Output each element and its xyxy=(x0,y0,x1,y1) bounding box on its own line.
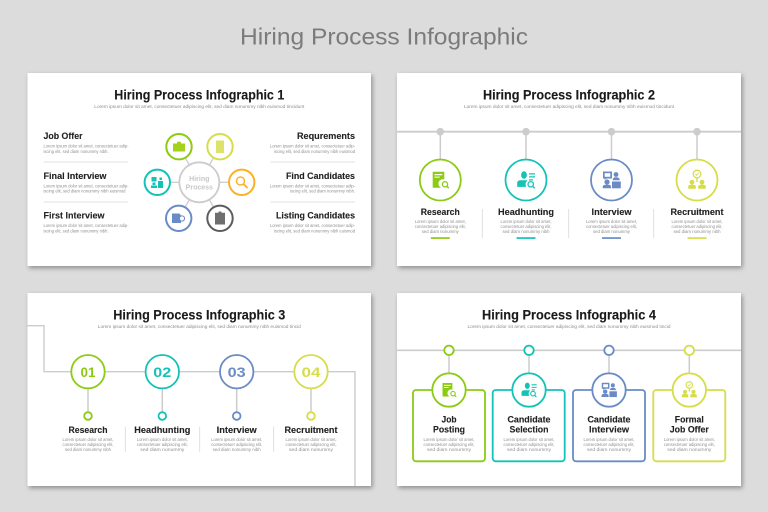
step 03: Interview xyxy=(217,425,258,435)
step 01: sed diam nonummy nibh xyxy=(65,447,112,452)
left item: First Interview: Lorem ipsum dolor sit amet, consectetuer adip- xyxy=(44,223,129,228)
icon: magnifier xyxy=(229,170,254,195)
step: Research: Research xyxy=(421,207,460,217)
left item: Job Offer xyxy=(44,131,129,154)
step 02: Lorem ipsum dolor sit amet, xyxy=(137,437,188,442)
panel: infographic 3 xyxy=(28,293,371,486)
card: Job Posting: Posting xyxy=(433,424,465,434)
right item: Find Candidates: iscing elit, sed diam nonummy nibh. xyxy=(290,189,355,194)
card: Formal Job Offer: sed diam nonummy xyxy=(667,447,712,452)
step: Research: sed diam nonummy xyxy=(422,229,460,234)
right item: Listing Candidates: iscing elit, sed diam nonummy nibh euismod xyxy=(274,228,356,233)
step 04: 04 xyxy=(302,364,321,380)
panel: infographic 4 xyxy=(397,293,741,486)
subtitle 2: Lorem ipsum dolor sit amet, consectetuer adipiscing elit, sed diam nonummy nibh euismod tincidunt xyxy=(464,104,675,109)
hub circle: Hiring xyxy=(189,176,209,183)
icon: clipboard xyxy=(207,206,233,231)
right item: Requrements: Requrements xyxy=(297,131,355,141)
step: Interview: Interview xyxy=(592,207,633,217)
step 04: Lorem ipsum dolor sit amet, xyxy=(286,437,336,442)
step 02: Headhunting xyxy=(134,425,190,435)
card: Candidate Interview: Candidate xyxy=(588,415,630,425)
step: Recruitment: sed diam nonummy nibh xyxy=(674,229,721,234)
step: Headhunting: sed diam nonummy nibh xyxy=(502,229,550,234)
panel: infographic 2 xyxy=(397,73,741,266)
heading 3: Hiring Process Infographic 3 xyxy=(113,308,286,322)
right item: Find Candidates: Find Candidates xyxy=(286,171,355,181)
card: Job Posting: Lorem ipsum dolor sit amet, xyxy=(424,437,474,442)
step 04: sed diam nonummy xyxy=(289,447,334,452)
card: Candidate Interview: Lorem ipsum dolor sit amet, xyxy=(584,437,634,442)
step 04: consectetuer adipiscing elit, xyxy=(286,442,336,447)
step: Recruitment: Recruitment xyxy=(670,207,724,217)
step 02: sed diam nonummy xyxy=(140,447,185,452)
icon: briefcase xyxy=(166,134,192,159)
left item: First Interview xyxy=(44,211,129,233)
right item: Listing Candidates xyxy=(270,211,356,233)
step: Interview xyxy=(586,128,637,239)
step 01 xyxy=(62,355,114,452)
step: Headhunting: Headhunting xyxy=(498,207,554,217)
step: Research xyxy=(415,128,466,239)
step: Recruitment xyxy=(670,128,724,239)
step 02 xyxy=(134,355,190,452)
card: Candidate Selection: Selection xyxy=(510,424,548,434)
step 01: Research xyxy=(68,425,108,435)
step 03: Lorem ipsum dolor sit amet, xyxy=(211,437,262,442)
card: Formal Job Offer: consectetuer adipiscing elit, xyxy=(664,442,715,447)
step: Headhunting: Lorem ipsum dolor sit amet, xyxy=(500,219,552,224)
card: Formal Job Offer: Formal xyxy=(675,415,704,425)
step: Interview: sed diam nonummy xyxy=(593,229,631,234)
step: Recruitment: consectetuer adipiscing elit, xyxy=(672,224,722,229)
step 01: consectetuer adipiscing elit, xyxy=(62,442,114,447)
left item: First Interview: iscing elit, sed diam nonummy nibh. xyxy=(44,228,108,233)
step 03: sed diam nonummy nibh xyxy=(213,447,261,452)
step: Interview: Lorem ipsum dolor sit amet, xyxy=(586,219,637,224)
card: Candidate Selection: sed diam nonummy xyxy=(507,447,552,452)
card: Candidate Selection: Candidate xyxy=(508,415,550,425)
step: Interview: consectetuer adipiscing elit, xyxy=(586,224,637,229)
right item: Find Candidates: Lorem ipsum dolor sit amet, consectetuer adip- xyxy=(270,183,356,188)
icon: document xyxy=(207,134,233,159)
left item: Job Offer: Lorem ipsum dolor sit amet, consectetuer adip- xyxy=(44,144,129,149)
step: Headhunting xyxy=(498,128,554,239)
card: Candidate Interview: sed diam nonummy xyxy=(587,447,632,452)
card: Formal Job Offer: Lorem ipsum dolor sit amet, xyxy=(664,437,715,442)
hub diagram xyxy=(145,134,254,231)
right item: Listing Candidates: Lorem ipsum dolor sit amet, consectetuer adip- xyxy=(270,223,356,228)
right item: Find Candidates xyxy=(270,171,356,194)
heading 2: Hiring Process Infographic 2 xyxy=(483,88,655,102)
subtitle 1: Lorem ipsum dolor sit amet, consectetuer adipiscing elit, sed diam nonummy nibh euismod tincidunt xyxy=(94,104,305,109)
left item: Job Offer: Job Offer xyxy=(44,131,83,141)
heading 1: Hiring Process Infographic 1 xyxy=(114,88,285,102)
main title: Hiring Process Infographic xyxy=(240,23,528,49)
card: Candidate Selection xyxy=(493,346,565,461)
step 03: consectetuer adipiscing elit, xyxy=(211,442,262,447)
step: Headhunting: consectetuer adipiscing elit, xyxy=(500,224,552,229)
step: Research: consectetuer adipiscing elit, xyxy=(415,224,466,229)
subtitle 4: Lorem ipsum dolor sit amet, consectetuer adipiscing elit, sed diam nonummy nibh euismod tincid xyxy=(468,324,671,329)
left item: Final Interview: iscing elit, sed diam nonummy nibh euismod xyxy=(44,189,126,194)
left item: Final Interview: Lorem ipsum dolor sit amet, consectetuer adip- xyxy=(44,183,129,188)
card: Job Posting: sed diam nonummy xyxy=(427,447,472,452)
step 02: consectetuer adipiscing elit, xyxy=(137,442,188,447)
left item: Final Interview: Final Interview xyxy=(44,171,107,181)
step 03: 03 xyxy=(228,364,246,380)
heading 4: Hiring Process Infographic 4 xyxy=(482,308,656,322)
right item: Requrements xyxy=(270,131,356,154)
subtitle 3: Lorem ipsum dolor sit amet, consectetuer adipiscing elit, sed diam nonummy nibh euismod tincid xyxy=(98,324,301,329)
right item: Requrements: Lorem ipsum dolor sit amet, consectetuer adip- xyxy=(270,144,356,149)
step: Research: Lorem ipsum dolor sit amet, xyxy=(415,219,466,224)
step 01: 01 xyxy=(80,364,96,380)
hub circle: Process xyxy=(186,184,213,192)
card: Candidate Interview: consectetuer adipiscing elit, xyxy=(584,442,634,447)
card: Candidate Interview xyxy=(573,346,645,461)
card: Job Posting: consectetuer adipiscing elit, xyxy=(424,442,474,447)
card: Candidate Interview: Interview xyxy=(589,424,630,434)
step 02: 02 xyxy=(153,364,172,380)
card: Formal Job Offer xyxy=(653,346,725,461)
step: Recruitment: Lorem ipsum dolor sit amet, xyxy=(672,219,722,224)
connector line xyxy=(28,326,355,486)
card: Job Posting: Job xyxy=(442,415,457,425)
right item: Requrements: iscing elit, sed diam nonummy nibh euismod xyxy=(274,149,356,154)
hub circle xyxy=(179,162,219,202)
card: Formal Job Offer: Job Offer xyxy=(670,424,709,434)
step 01: Lorem ipsum dolor sit amet, xyxy=(62,437,114,442)
panel: infographic 1 xyxy=(28,73,371,266)
card: Candidate Selection: Lorem ipsum dolor sit amet, xyxy=(504,437,554,442)
step 03 xyxy=(211,355,262,452)
icon: team xyxy=(145,170,170,195)
step 04 xyxy=(284,355,338,452)
card: Candidate Selection: consectetuer adipiscing elit, xyxy=(504,442,554,447)
left item: Job Offer: iscing elit, sed diam nonummy nibh. xyxy=(44,149,108,154)
icon: folder badge xyxy=(166,206,191,231)
card: Job Posting xyxy=(413,346,485,461)
right item: Listing Candidates: Listing Candidates xyxy=(276,211,355,221)
left item: Final Interview xyxy=(44,171,129,194)
step 04: Recruitment xyxy=(284,425,338,435)
left item: First Interview: First Interview xyxy=(44,211,105,221)
